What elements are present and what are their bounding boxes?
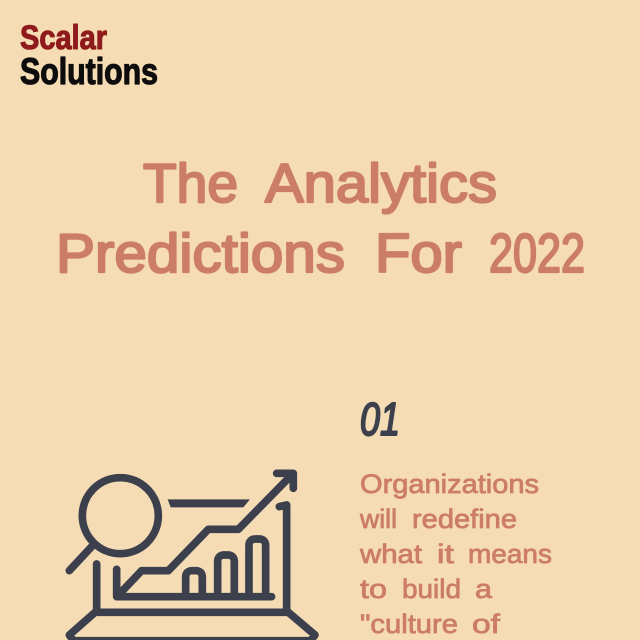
title line 1: The xyxy=(143,152,238,214)
title line 2: Predictions xyxy=(56,222,345,284)
text line 5: of xyxy=(472,609,501,639)
prediction number: 01 xyxy=(360,393,400,445)
text line 3: what xyxy=(359,539,423,569)
text line 4 xyxy=(360,574,493,604)
icon: laptop with analytics chart and magnifier xyxy=(69,473,315,640)
logo word: Scalar: Scalar xyxy=(20,19,107,57)
text line 3 xyxy=(359,539,552,569)
text line 2: redefine xyxy=(412,504,517,534)
text line 4: a xyxy=(475,574,493,604)
title line 1: Analytics xyxy=(265,152,497,214)
logo: Scalar Solutions xyxy=(20,19,158,92)
text line 5 xyxy=(360,609,501,639)
prediction text xyxy=(359,469,552,639)
text line 2: will xyxy=(359,504,397,534)
title line 2: For xyxy=(375,222,462,284)
text line 3: it xyxy=(437,539,455,569)
text line 5: "culture xyxy=(360,609,458,639)
logo word: Solutions: Solutions xyxy=(20,51,158,92)
text line 4: to xyxy=(360,574,387,604)
icon: screen top edge xyxy=(168,499,250,507)
title line 2 xyxy=(56,222,585,284)
icon: laptop base xyxy=(69,612,315,640)
icon: chart axes xyxy=(117,569,272,597)
icon: laptop screen sides xyxy=(97,505,287,612)
title xyxy=(56,152,585,284)
text line 4: build xyxy=(402,574,461,604)
icon: bar chart columns xyxy=(186,539,266,593)
title line 1 xyxy=(143,152,497,214)
icon: magnifying glass xyxy=(69,478,158,571)
title line 2: 2022 xyxy=(489,222,585,284)
icon: rising trend arrow xyxy=(122,473,293,592)
text line 2 xyxy=(359,504,517,534)
text line 3: means xyxy=(468,539,552,569)
text line 1: Organizations xyxy=(360,469,539,499)
